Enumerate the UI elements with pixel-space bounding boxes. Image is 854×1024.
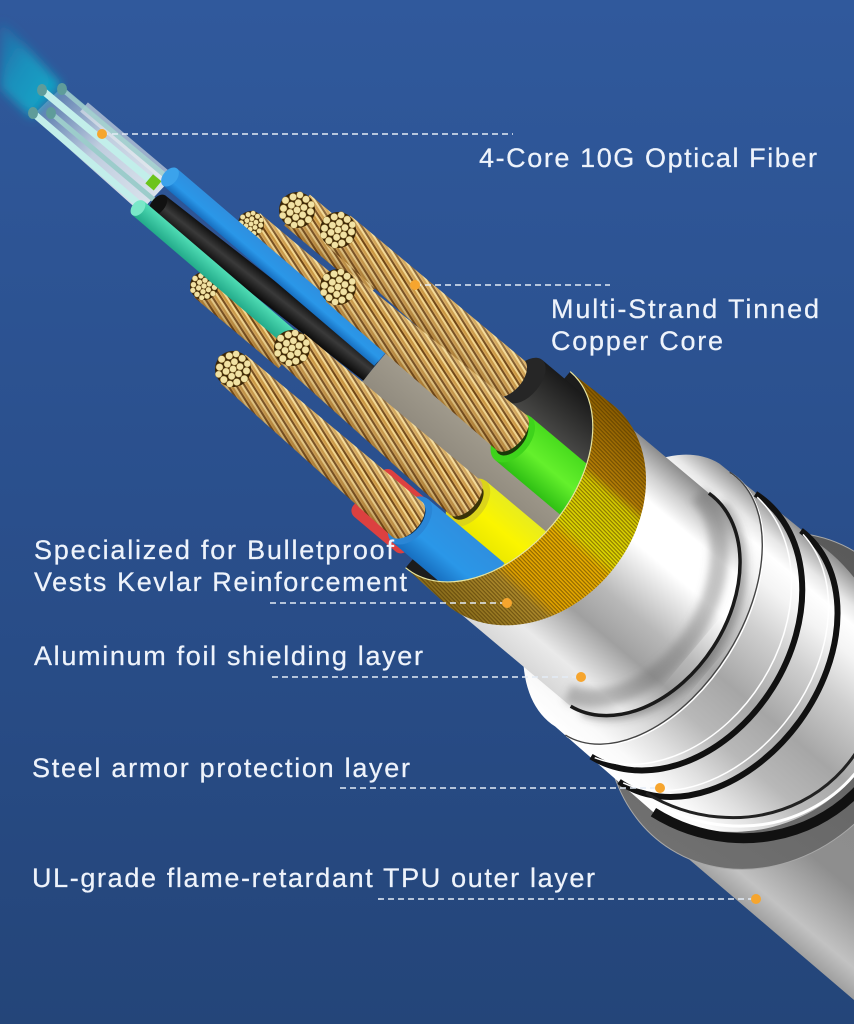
fiber A bbox=[57, 83, 168, 178]
callout: 4-core fiber bbox=[97, 129, 817, 173]
fiber B bbox=[37, 84, 150, 180]
callout: 4-core fiber: 4-Core 10G Optical Fiber bbox=[479, 143, 817, 173]
TPU front rim bbox=[544, 473, 854, 929]
TPU and metal sections bbox=[405, 356, 854, 961]
callout: aluminum foil bbox=[34, 641, 586, 682]
callout: kevlar: Specialized for Bulletproof bbox=[34, 535, 394, 565]
callout: kevlar bbox=[34, 535, 512, 608]
callout: aluminum foil: Aluminum foil shielding layer bbox=[34, 641, 423, 671]
red core bbox=[348, 466, 440, 557]
callout: TPU outer layer: UL-grade flame-retardant TPU outer layer bbox=[32, 863, 595, 893]
fiber sub-cables bbox=[128, 164, 389, 381]
copper strand 3 bbox=[309, 257, 536, 458]
teal sub-cable bbox=[128, 197, 304, 351]
green conductor jacket bbox=[482, 406, 615, 531]
icon: blue light beam from fiber bbox=[0, 22, 62, 118]
callout: copper core: Copper Core bbox=[551, 326, 723, 356]
callout: steel armor bbox=[32, 753, 665, 793]
translucent fiber sheath bbox=[32, 87, 172, 212]
callout: copper core: Multi-Strand Tinned bbox=[551, 294, 819, 324]
fiber C bbox=[46, 107, 160, 205]
insulated conductors bbox=[379, 350, 652, 633]
black conductor jacket bbox=[496, 350, 619, 465]
gray inner jacket and dark interior bbox=[288, 273, 637, 624]
blue conductor jacket bbox=[379, 488, 505, 606]
outer TPU layer body bbox=[620, 552, 854, 1000]
copper strand 7 bbox=[232, 205, 352, 312]
copper strand 6 bbox=[183, 265, 298, 368]
callout: TPU outer layer bbox=[32, 863, 761, 904]
kevlar reinforcement band bbox=[404, 370, 694, 672]
copper strand 2 bbox=[263, 318, 489, 523]
copper strand 5 bbox=[270, 183, 394, 296]
copper strand 4 bbox=[309, 200, 534, 404]
black sub-cable bbox=[145, 191, 378, 381]
aluminum foil layer bbox=[448, 410, 788, 753]
rear small copper strands bbox=[183, 183, 394, 368]
large copper strands bbox=[204, 200, 536, 545]
optical fibers bbox=[28, 83, 172, 212]
callout: copper core bbox=[410, 280, 819, 356]
steel armor layer bbox=[464, 414, 854, 904]
fiber D bbox=[28, 107, 140, 205]
green fiber stub bbox=[145, 174, 161, 190]
callout: steel armor: Steel armor protection layer bbox=[32, 753, 410, 783]
copper strand 1 bbox=[204, 339, 432, 545]
callout: kevlar: Vests Kevlar Reinforcement bbox=[34, 567, 407, 597]
blue sub-cable bbox=[158, 164, 389, 366]
yellow conductor jacket bbox=[437, 470, 569, 593]
